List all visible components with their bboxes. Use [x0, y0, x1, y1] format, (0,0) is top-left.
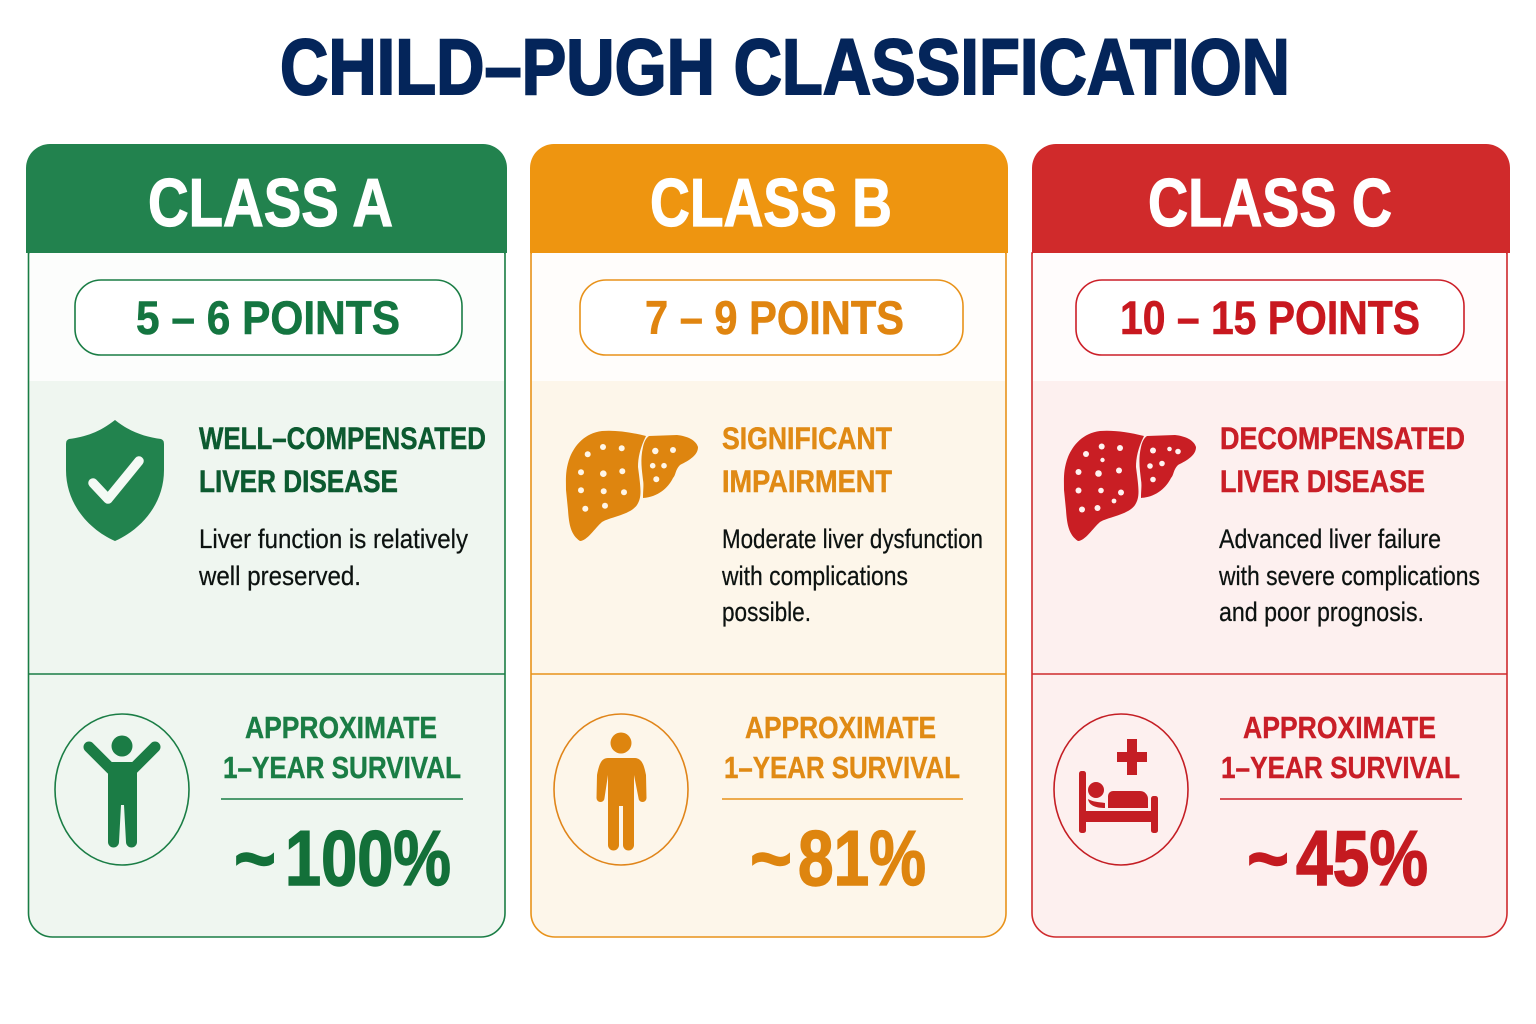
description: LIVER DISEASE [1220, 463, 1425, 499]
survival stat: 1–YEAR SURVIVAL [724, 751, 960, 785]
icon: liver [566, 431, 698, 541]
panel background [531, 253, 1006, 937]
title: CHILD–PUGH CLASSIFICATION [280, 22, 1290, 111]
survival stat: APPROXIMATE [1243, 711, 1436, 745]
class heading: CLASS C [1148, 165, 1392, 241]
description [1218, 420, 1480, 627]
points pill: 10 – 15 POINTS [1120, 291, 1420, 344]
icon: person with raised arms [55, 714, 189, 865]
icon: standing person [554, 714, 688, 865]
description [721, 420, 983, 627]
survival stat [1220, 711, 1462, 902]
points pill [1076, 280, 1464, 355]
survival stat: 45% [1296, 814, 1428, 902]
points pill [75, 280, 462, 355]
points band [30, 253, 504, 381]
survival stat [722, 711, 963, 902]
class heading: CLASS A [148, 165, 393, 241]
icon: liver [1064, 431, 1196, 541]
survival stat [221, 711, 463, 902]
header bar [530, 144, 1008, 253]
description: IMPAIRMENT [722, 463, 892, 499]
description: LIVER DISEASE [199, 463, 398, 499]
survival stat: ~ [234, 814, 276, 902]
survival stat: ~ [750, 814, 792, 902]
survival stat: APPROXIMATE [245, 711, 437, 745]
panel: class A [26, 144, 507, 937]
description: with complications [721, 561, 908, 591]
survival stat: ~ [1247, 814, 1289, 902]
description [198, 420, 486, 591]
description: with severe complications [1218, 561, 1480, 591]
icon: patient in bed with medical cross [1054, 714, 1188, 865]
description: Moderate liver dysfunction [722, 524, 983, 554]
description: possible. [722, 597, 811, 627]
description: WELL–COMPENSATED [199, 420, 486, 456]
points pill: 5 – 6 POINTS [136, 291, 400, 344]
description: DECOMPENSATED [1220, 420, 1465, 456]
panel: class B [530, 144, 1008, 937]
points band [1033, 253, 1506, 381]
points pill: 7 – 9 POINTS [645, 291, 904, 344]
description: SIGNIFICANT [722, 420, 892, 456]
survival stat: APPROXIMATE [745, 711, 936, 745]
header bar [1032, 144, 1510, 253]
panel background [1032, 253, 1507, 937]
description: and poor prognosis. [1219, 597, 1424, 627]
points band [532, 253, 1005, 381]
icon: shield with check [66, 420, 164, 541]
survival stat: 81% [798, 814, 926, 902]
class heading: CLASS B [650, 165, 892, 241]
description: Liver function is relatively [199, 524, 468, 554]
points pill [580, 280, 963, 355]
survival stat: 100% [285, 814, 451, 902]
description: well preserved. [198, 561, 361, 591]
survival stat: 1–YEAR SURVIVAL [1221, 751, 1460, 785]
panel background [28, 253, 505, 937]
description: Advanced liver failure [1219, 524, 1441, 554]
header bar [26, 144, 507, 253]
panel: class C [1032, 144, 1510, 937]
survival stat: 1–YEAR SURVIVAL [223, 751, 461, 785]
